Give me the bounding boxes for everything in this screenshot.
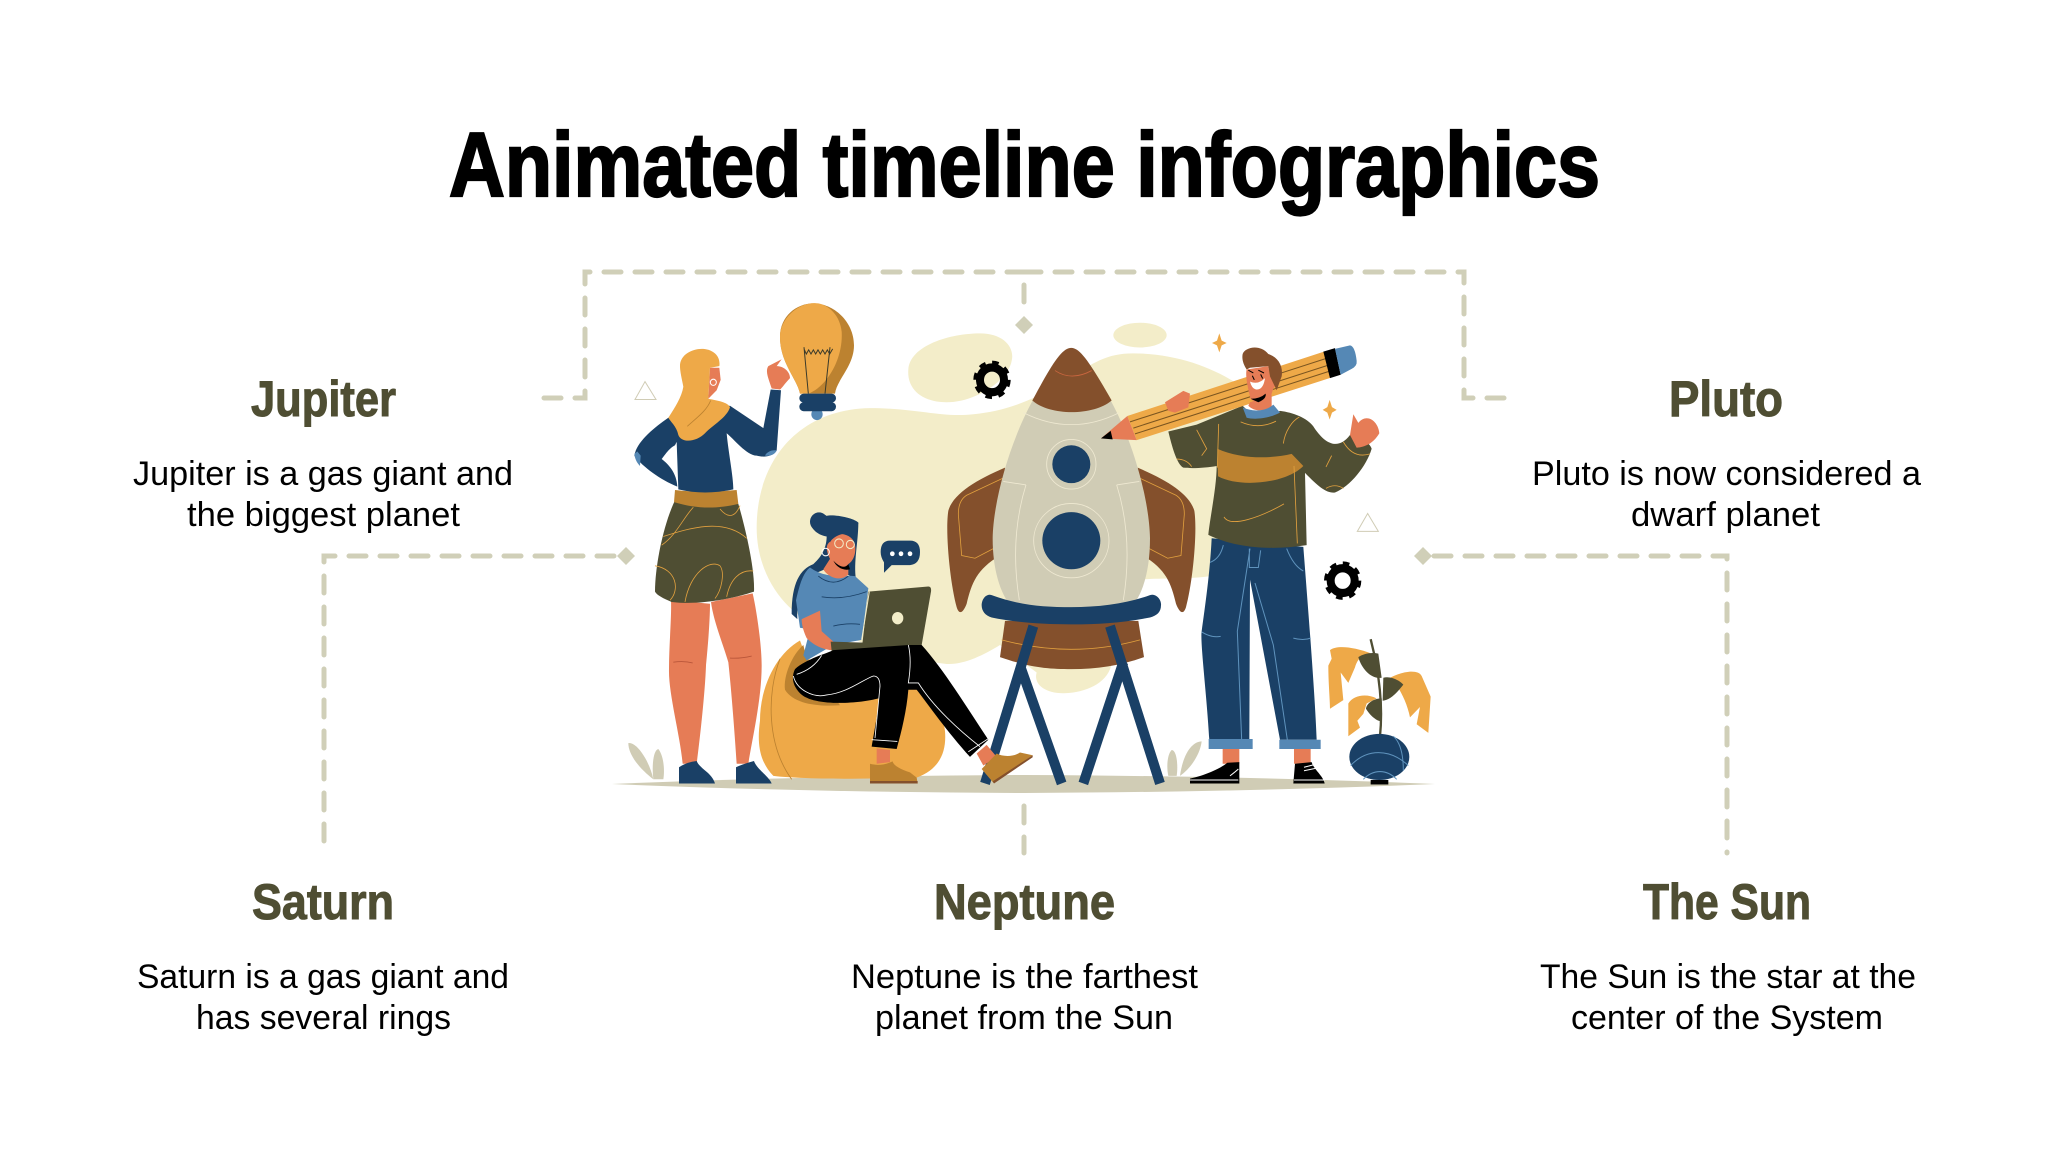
- stand base: [1000, 621, 1144, 669]
- section: Neptune: Neptune is the farthest: [851, 958, 1199, 996]
- section: Pluto: Pluto is now considered a: [1532, 455, 1921, 493]
- decorative triangles: [635, 382, 1378, 531]
- potted plant: [1328, 639, 1431, 784]
- pencil: [1101, 345, 1357, 440]
- sparkles: [1212, 333, 1337, 419]
- section: Neptune: planet from the Sun: [875, 999, 1173, 1037]
- section: Jupiter: the biggest planet: [187, 496, 461, 534]
- standing man with pencil: [1101, 333, 1431, 784]
- section: Jupiter: Jupiter: [251, 371, 396, 427]
- section: Saturn: [137, 874, 509, 1037]
- seated woman on pouf: [759, 512, 1033, 783]
- section: Pluto: dwarf planet: [1631, 496, 1821, 534]
- section: Saturn: Saturn is a gas giant and: [137, 958, 509, 996]
- head: [1248, 395, 1272, 410]
- stand top: [982, 595, 1161, 624]
- section: Pluto: Pluto: [1669, 371, 1783, 427]
- icon: gear right: [1327, 565, 1358, 596]
- stand legs: [985, 626, 1160, 783]
- section: Jupiter: Jupiter is a gas giant and: [133, 455, 513, 493]
- section: Neptune: Neptune: [934, 874, 1115, 930]
- grass tufts: [628, 741, 1202, 779]
- illustration artwork: [628, 303, 1431, 784]
- rocket: [947, 348, 1195, 783]
- rocket fins: [947, 468, 1195, 612]
- rocket windows: [1034, 439, 1109, 578]
- section: The Sun: The Sun: [1643, 874, 1811, 930]
- sweater: [1168, 406, 1372, 548]
- rocket body: [993, 401, 1150, 607]
- cream background blobs: [757, 323, 1245, 693]
- jeans: [1201, 538, 1317, 740]
- icon: gear left: [977, 364, 1007, 396]
- section: Pluto: [1532, 371, 1921, 534]
- title: Animated timeline infographics: [449, 115, 1600, 216]
- section: Saturn: Saturn: [252, 874, 394, 930]
- speech bubble: [881, 541, 920, 573]
- section: Jupiter: [133, 371, 513, 534]
- rocket nose: [1032, 348, 1112, 412]
- section: Saturn: has several rings: [196, 999, 451, 1037]
- section: The Sun: The Sun is the star at the: [1540, 958, 1916, 996]
- icon: light bulb: [780, 303, 854, 420]
- ground shadow: [612, 775, 1435, 793]
- thumbs-up hand: [1350, 414, 1379, 448]
- standing woman: [634, 349, 790, 783]
- dashed connectors: [324, 272, 1727, 853]
- section: The Sun: [1540, 874, 1916, 1037]
- section: Neptune: [851, 874, 1199, 1037]
- central illustration: [612, 303, 1435, 793]
- section: The Sun: center of the System: [1571, 999, 1883, 1037]
- laptop: [831, 586, 931, 651]
